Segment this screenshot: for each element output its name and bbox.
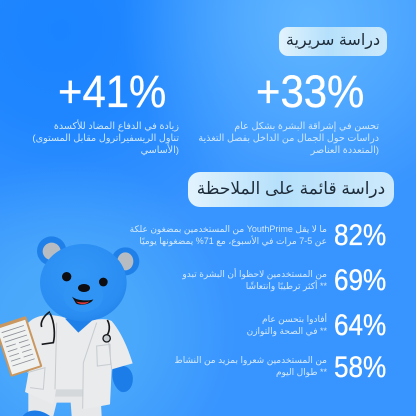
stat row: 82%	[130, 219, 386, 252]
eyes	[62, 272, 71, 281]
value: 69%: 69%	[334, 264, 386, 297]
description: 64%: ** في الصحة والتوازن	[247, 326, 327, 336]
description: 64%	[247, 313, 327, 336]
head	[40, 244, 127, 321]
value: 64%: 64%	[334, 309, 386, 342]
text block: +33% description: (المتعددة العناصر	[311, 145, 379, 156]
stat: +33%: +33%	[256, 66, 364, 117]
value: 82%: 82%	[334, 219, 386, 252]
heading pill: observational study: دراسة قائمة على الملاحظة	[197, 179, 385, 198]
value: 58%: 58%	[334, 351, 386, 384]
stethoscope	[41, 312, 109, 344]
scrub collar	[65, 316, 93, 333]
heading pill: observational study	[188, 172, 394, 207]
description: 69%: من المستخدمين لاحظوا أن البشرة تبدو	[182, 269, 327, 279]
description: 69%	[182, 268, 327, 292]
text block: +41% description: (الأساسي	[141, 145, 179, 156]
stat row: 58%	[174, 351, 386, 384]
description: 82%	[130, 224, 327, 246]
right inner ear	[117, 252, 133, 270]
text block: +33% description: تحسن في إشراقة البشرة بشكل عام	[234, 121, 379, 132]
coat	[25, 315, 133, 409]
text block: +41% description	[32, 120, 179, 156]
clipboard	[0, 316, 43, 377]
right ear	[111, 247, 139, 275]
coat shadow details	[27, 323, 112, 409]
illustration: blue teddy bear doctor	[0, 236, 140, 416]
mouth	[72, 297, 93, 305]
left ear	[37, 236, 66, 266]
description: 58%	[174, 355, 327, 378]
text block: +33% description	[198, 121, 379, 156]
heading pill: clinical study	[279, 27, 387, 56]
text block: +41% description: زيادة في الدفاع المضاد للأكسدة	[54, 121, 179, 132]
heading pill: clinical study: دراسة سريرية	[286, 32, 380, 49]
scrub hem shadow	[55, 389, 83, 397]
stat: +41%: +41%	[58, 66, 166, 117]
text block: +33% description: دراسات حول الجمال من الداخل بفصل التغذية	[198, 133, 379, 144]
description: 64%: أفادوا بتحسن عام	[262, 314, 327, 324]
description: 58%: من المستخدمين شعروا بمزيد من النشاط	[174, 355, 327, 365]
stat row: 69%	[182, 264, 386, 297]
text block: +41% description: تناول الريسفيراترول مقابل المستوى)	[32, 133, 179, 144]
foot	[23, 410, 50, 416]
muzzle	[63, 279, 103, 312]
description: 58%: ** طوال اليوم	[276, 367, 327, 377]
description: 82%: ما لا يقل YouthPrime من المستخدمين بمضغون علكة	[130, 224, 327, 234]
right arm paw	[112, 366, 133, 392]
nose	[78, 284, 90, 292]
description: 82%: عن 5-7 مرات في الأسبوع، مع 71% يمضغونها يوميًا	[139, 236, 327, 246]
trousers	[28, 386, 102, 416]
description: 69%: ** أكثر ترطيبًا وانتعاشًا	[246, 281, 327, 291]
left inner ear	[43, 243, 61, 260]
stat row: 64%	[247, 309, 386, 342]
